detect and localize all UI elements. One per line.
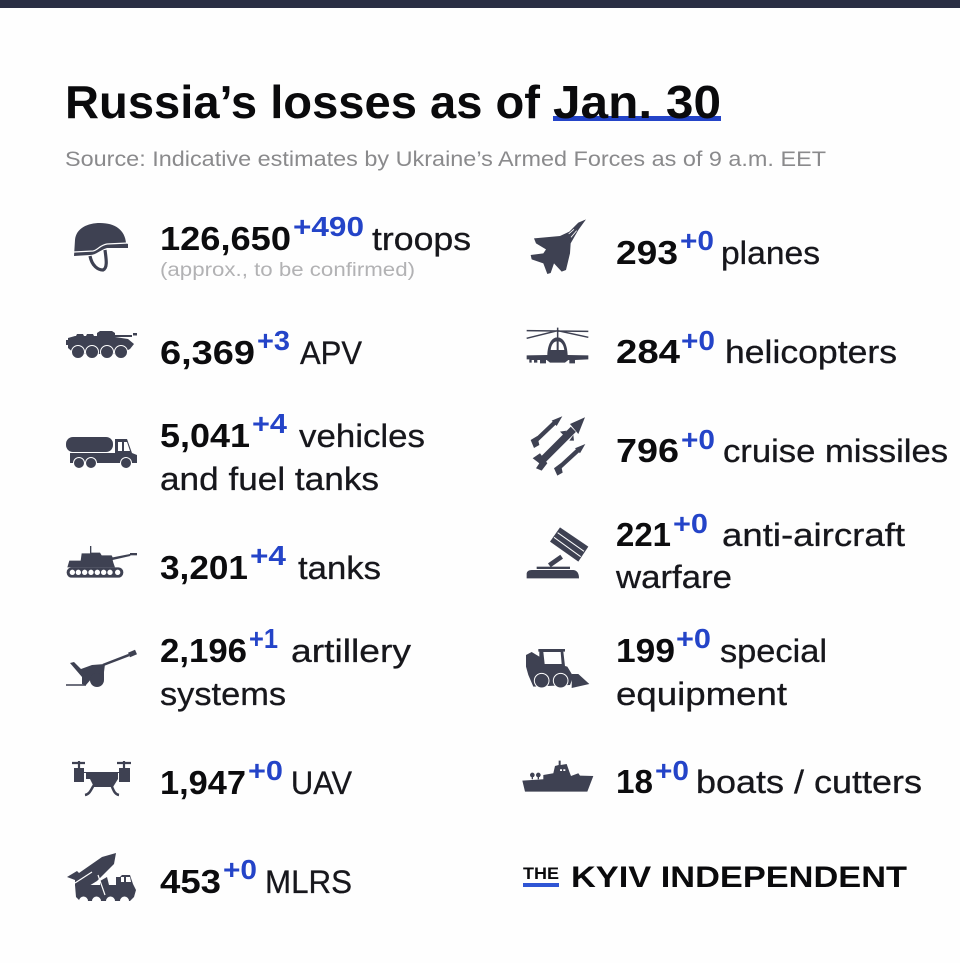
row: cruise missiles: 796 [616,432,679,469]
row: anti-aircraft warfare [527,508,905,595]
row: vehicles and fuel tanks: and fuel tanks [160,461,379,497]
title: Jan. 30 [553,76,721,128]
row: special equipment: 199 [616,632,675,669]
row: planes: +0 [680,225,714,256]
row: special equipment [526,623,827,712]
row: helicopters [527,325,897,370]
row: MLRS: MLRS [265,864,352,900]
icon: missiles [531,416,585,476]
icon: fighter jet [531,219,586,274]
row: special equipment: equipment [616,676,787,712]
source line: Source: Indicative estimates by Ukraine’s Armed Forces as of 9 a.m. EET [65,148,826,171]
row: tanks: 3,201 [160,549,248,586]
row: MLRS [67,853,352,901]
icon: drone [72,761,131,795]
row: artillery systems [66,623,411,712]
row: tanks [67,540,381,586]
row: APV: APV [300,335,363,371]
row: cruise missiles [531,416,948,476]
row: artillery systems: 2,196 [160,632,247,669]
row: vehicles and fuel tanks: 5,041 [160,417,250,454]
row: troops: 126,650 [160,220,291,257]
row: MLRS: 453 [160,863,221,900]
row: tanks: tanks [298,550,381,586]
icon: armoured vehicle [66,331,137,358]
row: UAV: UAV [291,765,353,801]
row: UAV: 1,947 [160,764,246,801]
row: APV: +3 [257,325,290,356]
icon: fuel truck [66,437,137,468]
row: boats and cutters: 18 [616,763,653,800]
row: vehicles and fuel tanks: +4 [252,408,287,439]
row: planes: 293 [616,234,678,271]
title: Russia’s losses as of [65,76,541,128]
row: helicopters: helicopters [725,334,897,370]
row: anti-aircraft warfare: anti-aircraft [722,517,905,553]
row: boats and cutters: +0 [655,755,689,786]
row: tanks: +4 [250,540,286,571]
logo: The Kyiv Independent: KYIV INDEPENDENT [571,861,907,894]
row: UAV: +0 [248,755,283,786]
row: anti-aircraft warfare: 221 [616,516,671,553]
row: artillery systems: +1 [249,623,278,654]
icon: warship [522,761,593,792]
top bar [0,0,960,8]
row: cruise missiles: +0 [681,424,715,455]
row: troops: troops [372,221,471,257]
icon: howitzer [66,652,136,687]
icon: rocket launcher [67,853,136,901]
row: anti-aircraft warfare: warfare [615,559,732,595]
icon: helicopter [527,328,588,363]
row: artillery systems: systems [160,676,286,712]
row: helicopters: 284 [616,333,681,370]
row: vehicles and fuel tanks [66,408,425,497]
logo: The Kyiv Independent: THE [523,864,559,883]
icon: helmet [74,223,128,270]
row: troops: +490 [293,211,364,242]
row: special equipment: special [720,633,827,669]
row: planes [531,219,820,274]
row: planes: planes [721,235,820,271]
row: troops [74,211,471,281]
row: MLRS: +0 [223,854,257,885]
row: APV: 6,369 [160,334,255,371]
row: cruise missiles: cruise missiles [723,433,948,469]
row: special equipment: +0 [676,623,711,654]
row: boats and cutters [522,755,922,800]
row: troops: (approx., to be confirmed) [160,260,415,281]
icon: skid loader [526,649,589,688]
row: UAV [72,755,353,801]
row: APV [66,325,363,371]
row: helicopters: +0 [681,325,715,356]
row: vehicles and fuel tanks: vehicles [299,418,425,454]
row: boats and cutters: boats / cutters [696,764,922,800]
row: artillery systems: artillery [291,633,411,669]
icon: anti-aircraft launcher [527,527,588,578]
row: anti-aircraft warfare: +0 [673,508,708,539]
icon: tank [67,546,137,578]
